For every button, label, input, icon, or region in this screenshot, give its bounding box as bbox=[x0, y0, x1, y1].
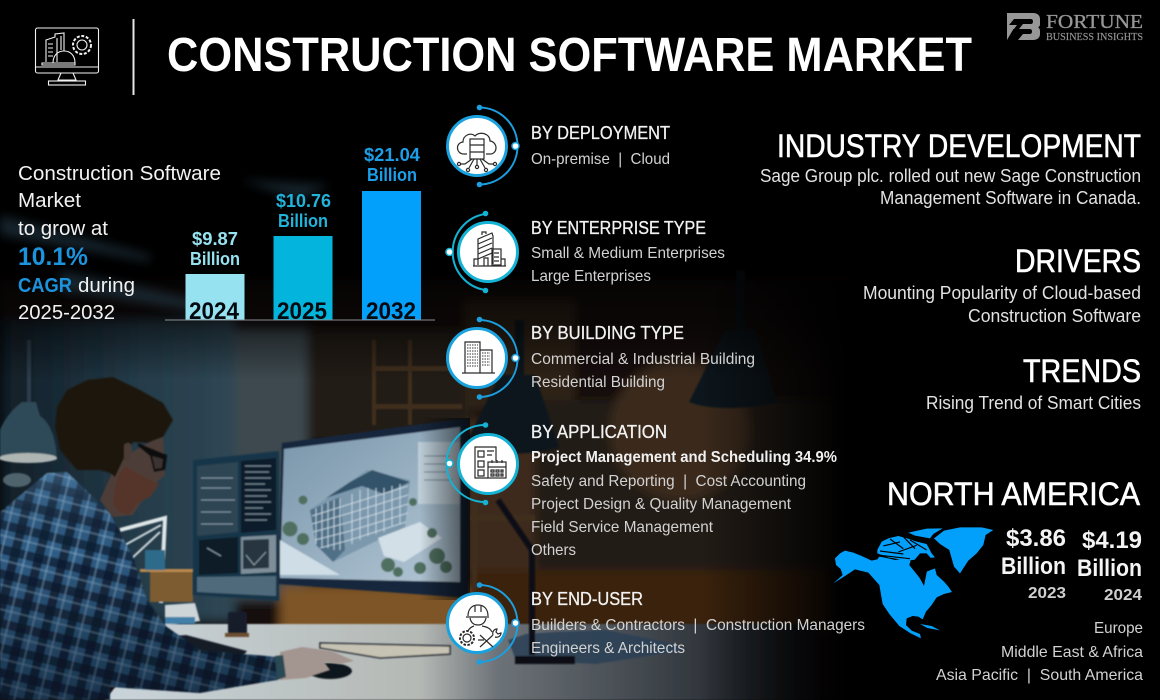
segment: by end-user: Builders & Contractors | Construction Managers bbox=[531, 617, 865, 634]
icon: checklist and calendar bbox=[446, 422, 518, 505]
logo tagline: BUSINESS INSIGHTS bbox=[1046, 32, 1143, 43]
icon: worker with gear and wrench bbox=[448, 582, 519, 665]
value 2023: Billion bbox=[1001, 553, 1066, 580]
segment: by end-user: Engineers & Architects bbox=[531, 640, 685, 657]
photo: shelf boards bbox=[372, 340, 535, 590]
panel: industry development bbox=[760, 128, 1141, 208]
value 2023: $3.86 bbox=[1006, 525, 1066, 552]
segment: by deployment: On-premise | Cloud bbox=[531, 151, 670, 168]
logo wordmark: FORTUNE bbox=[1046, 12, 1143, 33]
bar 2025: Billion bbox=[278, 211, 328, 231]
segment: by application: Others bbox=[531, 542, 576, 559]
segment: by application: Safety and Reporting | Cost Accounting bbox=[531, 473, 806, 490]
panel: industry development: Sage Group plc. rolled out new Sage Construction bbox=[760, 166, 1141, 186]
market growth text: during bbox=[78, 275, 135, 297]
panel: north america bbox=[833, 476, 1143, 684]
panel: drivers: DRIVERS bbox=[1015, 243, 1141, 279]
value 2023: 2023 bbox=[1028, 585, 1066, 602]
bar 2032 bbox=[362, 145, 421, 325]
bar 2032: $21.04 bbox=[364, 145, 420, 165]
other regions: Asia Pacific | South America bbox=[936, 667, 1143, 684]
bar 2025 bbox=[274, 191, 332, 325]
CAGR value: 10.1% bbox=[18, 243, 88, 271]
bar 2025: $10.76 bbox=[276, 191, 331, 211]
bar chart: market size bbox=[165, 145, 435, 325]
heading: NORTH AMERICA bbox=[887, 476, 1141, 512]
segment: by deployment bbox=[448, 105, 670, 187]
icon: city buildings bbox=[448, 317, 519, 400]
header icon: monitor with building, hard hat and gear bbox=[36, 28, 98, 85]
panel: drivers: Mounting Popularity of Cloud-based bbox=[863, 283, 1141, 303]
photo: white desk lamp and clutter bbox=[120, 518, 200, 626]
heading: BY APPLICATION bbox=[531, 422, 667, 442]
panel: drivers bbox=[863, 243, 1141, 326]
panel: trends: TRENDS bbox=[1023, 353, 1141, 389]
photo: room and shelves bbox=[0, 280, 860, 700]
market growth text: 2025-2032 bbox=[18, 302, 115, 324]
photo: hanging lamp bbox=[0, 340, 57, 487]
photo: engineer head, beard and glasses bbox=[55, 377, 173, 517]
background photo: engineer at workstation bbox=[0, 270, 860, 700]
leading segment share: Project Management and Scheduling 34.9% bbox=[531, 449, 837, 466]
segment: by application: Field Service Management bbox=[531, 519, 714, 536]
segment: by end-user bbox=[448, 582, 865, 665]
value 2024: 2024 bbox=[1104, 587, 1142, 604]
bar 2032: 2032 bbox=[366, 298, 416, 325]
photo: left monitor bbox=[193, 451, 279, 601]
value 2024: Billion bbox=[1077, 555, 1142, 582]
photo: desk lamp arm at center bbox=[498, 500, 686, 664]
bar 2024 bbox=[186, 229, 244, 325]
panel: trends bbox=[926, 353, 1141, 413]
segment: by building type bbox=[448, 317, 755, 400]
icon: cloud server bbox=[448, 105, 519, 187]
photo: desk bbox=[105, 624, 820, 700]
bar 2025: 2025 bbox=[277, 298, 327, 325]
bar 2024: 2024 bbox=[189, 298, 240, 325]
segment: by building type: Residential Building bbox=[531, 374, 665, 391]
panel: industry development: Management Software in Canada. bbox=[880, 188, 1141, 208]
background: faint light streaks bbox=[0, 180, 330, 312]
heading: BY ENTERPRISE TYPE bbox=[531, 218, 706, 238]
heading: BY END-USER bbox=[531, 589, 643, 609]
logo mark bbox=[1007, 13, 1040, 40]
segment: by building type: Commercial & Industrial Building bbox=[531, 351, 755, 368]
bar 2032: Billion bbox=[367, 165, 417, 185]
panel: drivers: Construction Software bbox=[968, 306, 1141, 326]
icon: office buildings bbox=[446, 211, 518, 293]
segment: by application bbox=[446, 422, 837, 559]
logo: Fortune Business Insights bbox=[1007, 12, 1143, 43]
header divider bbox=[132, 19, 134, 95]
heading: BY BUILDING TYPE bbox=[531, 323, 684, 343]
market growth text: Market bbox=[18, 190, 81, 212]
segment: by enterprise type bbox=[446, 211, 725, 293]
heading: BY DEPLOYMENT bbox=[531, 123, 670, 143]
other regions bbox=[936, 620, 1143, 684]
segment: by enterprise type: Large Enterprises bbox=[531, 268, 651, 285]
value 2023 bbox=[1001, 525, 1066, 602]
segment: by application: Project Design & Quality Management bbox=[531, 496, 792, 513]
market growth text bbox=[18, 163, 221, 324]
market growth text: Construction Software bbox=[18, 163, 221, 185]
bar 2024: $9.87 bbox=[192, 229, 238, 249]
photo: center pendant lamps bbox=[464, 270, 777, 454]
photo: right monitor with building model bbox=[278, 418, 468, 598]
title: CONSTRUCTION SOFTWARE MARKET bbox=[167, 29, 972, 82]
other regions: Middle East & Africa bbox=[1001, 644, 1143, 661]
map: north america bbox=[833, 527, 993, 638]
photo: desk items bbox=[176, 612, 450, 679]
value 2024: $4.19 bbox=[1082, 527, 1142, 554]
segment: by enterprise type: Small & Medium Enterprises bbox=[531, 245, 725, 262]
bar 2024: Billion bbox=[190, 249, 240, 269]
value 2024 bbox=[1077, 527, 1142, 604]
photo: engineer shirt, arm and hand bbox=[0, 472, 354, 700]
panel: trends: Rising Trend of Smart Cities bbox=[926, 393, 1141, 413]
market growth text: to grow at bbox=[18, 218, 108, 240]
market growth text: CAGR bbox=[18, 275, 73, 297]
other regions: Europe bbox=[1094, 620, 1143, 637]
